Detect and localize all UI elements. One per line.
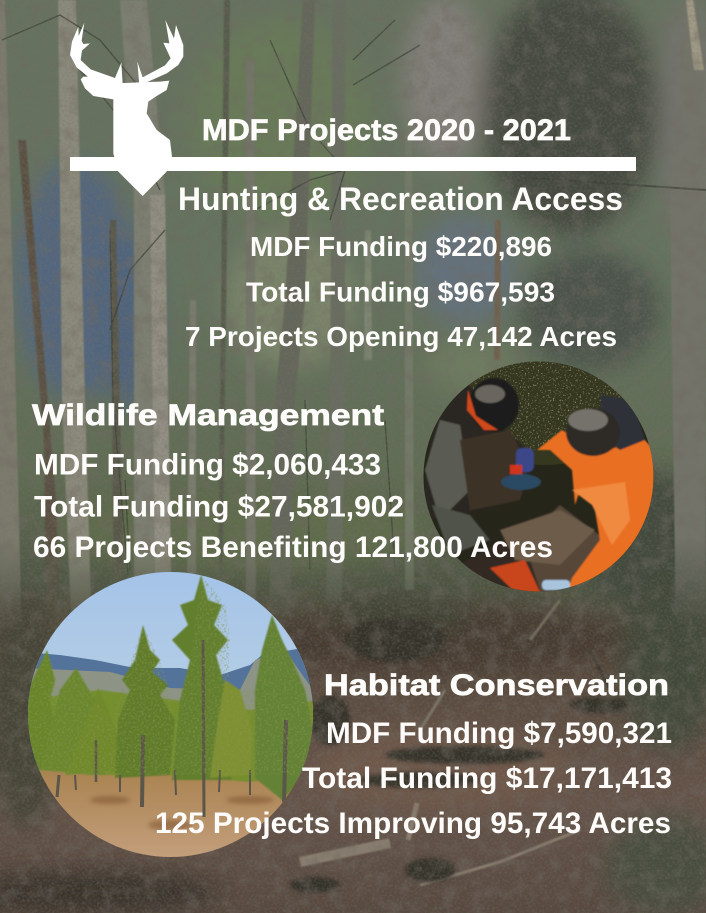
section: wildlife management: Wildlife Management xyxy=(32,399,384,432)
title: MDF Projects 2020 - 2021 xyxy=(202,114,571,147)
section: hunting and recreation access: MDF Funding $220,896 xyxy=(250,231,552,262)
section: hunting and recreation access: Hunting & Recreation Access xyxy=(178,181,623,217)
section: hunting and recreation access: 7 Projects Opening 47,142 Acres xyxy=(185,321,617,352)
title bar xyxy=(70,157,636,171)
section: habitat conservation xyxy=(155,669,672,840)
icon: white deer head with antlers xyxy=(70,20,183,196)
section: hunting and recreation access: Total Funding $967,593 xyxy=(246,276,555,308)
section: wildlife management: MDF Funding $2,060,433 xyxy=(34,448,381,482)
section: habitat conservation: 125 Projects Improving 95,743 Acres xyxy=(155,807,671,840)
photo: two biologists in orange tending an animal xyxy=(424,362,654,592)
section: hunting and recreation access xyxy=(178,181,623,352)
needle texture on the trees xyxy=(25,570,317,776)
section: wildlife management xyxy=(32,399,553,564)
speckled foliage behind the biologists xyxy=(470,360,620,450)
photo: young pine plantation xyxy=(25,570,320,863)
section: wildlife management: Total Funding $27,581,902 xyxy=(34,490,404,524)
section: habitat conservation: MDF Funding $7,590,321 xyxy=(326,717,672,750)
section: wildlife management: 66 Projects Benefiting 121,800 Acres xyxy=(33,531,553,564)
section: habitat conservation: Habitat Conservation xyxy=(324,669,669,702)
section: habitat conservation: Total Funding $17,171,413 xyxy=(302,762,672,795)
